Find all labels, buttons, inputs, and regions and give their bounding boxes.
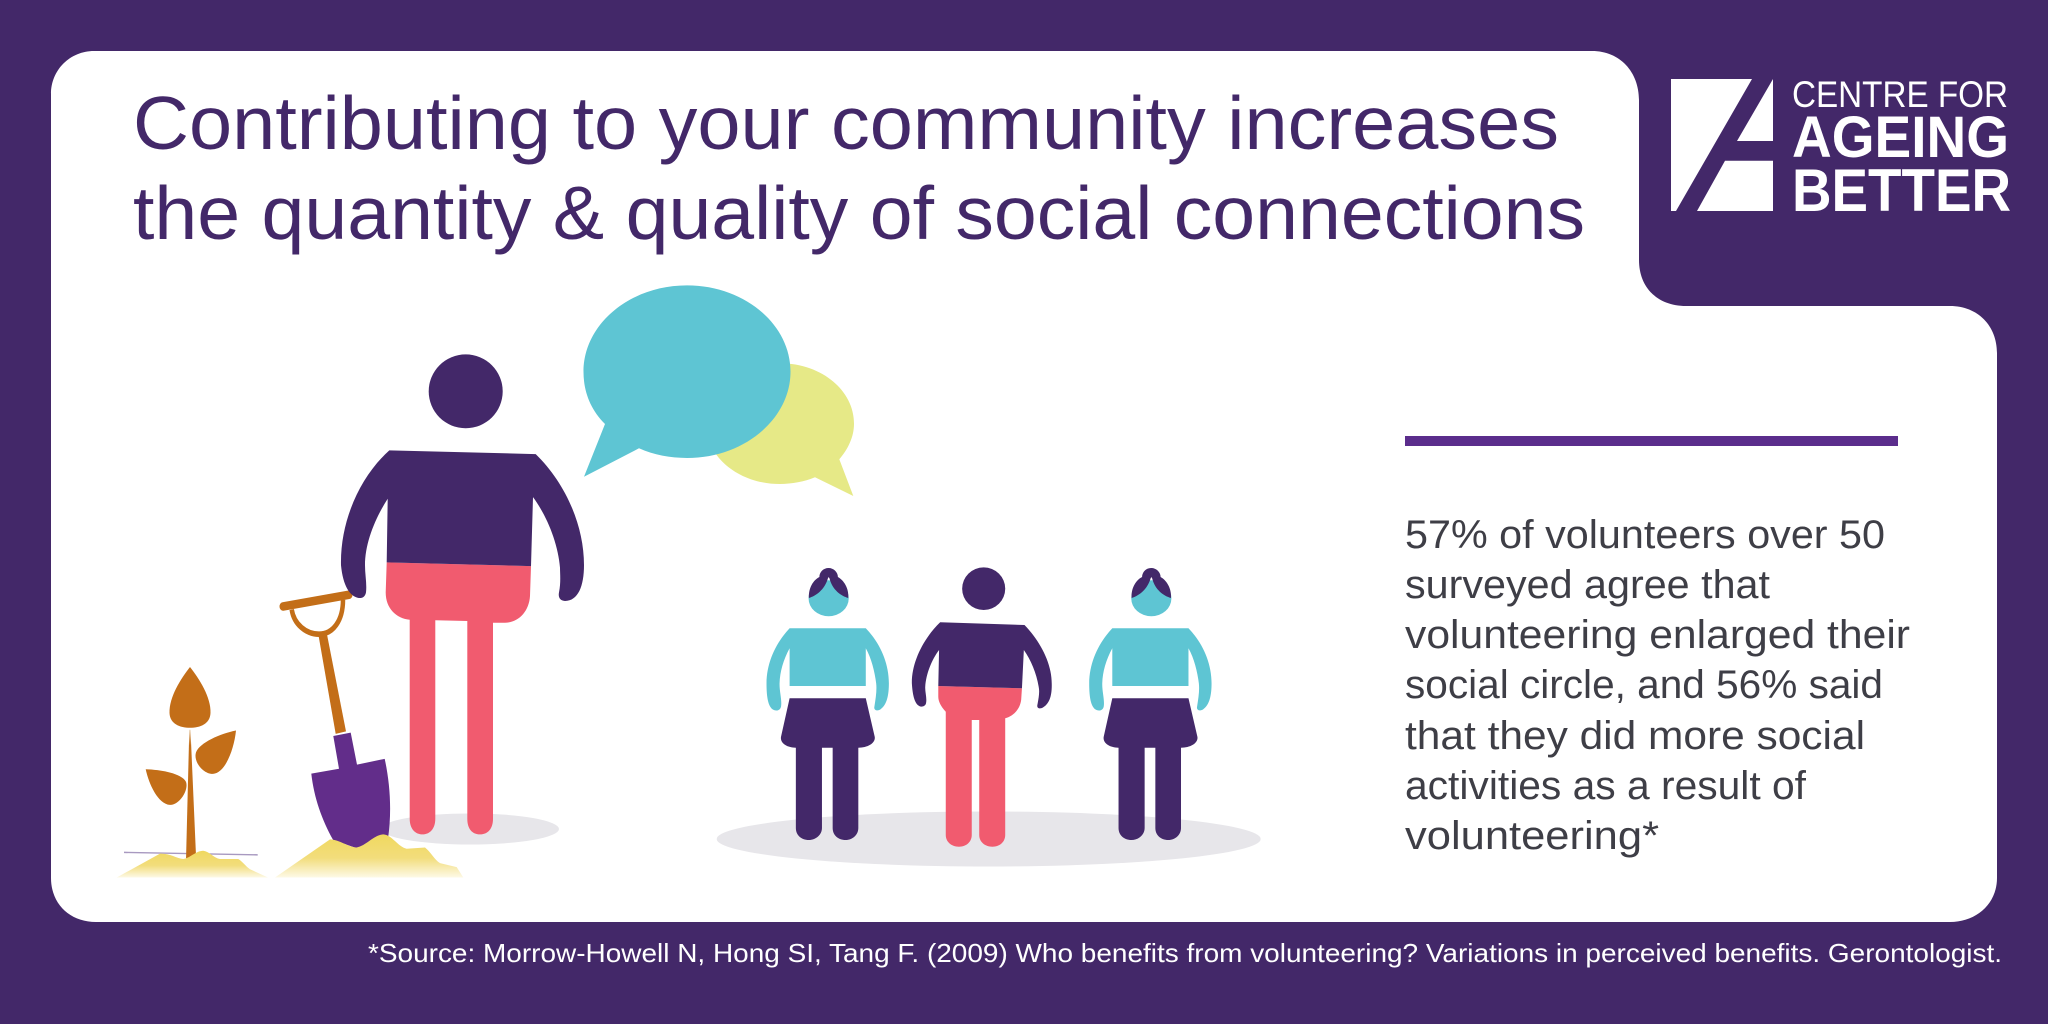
logo wordmark: CENTRE FOR [1792, 74, 2008, 115]
illustration: plant in soil [117, 667, 268, 878]
man legs and shorts [938, 686, 1022, 847]
man figure centre [912, 567, 1052, 847]
illustration: group of three figures [767, 567, 1212, 847]
horizon line [124, 852, 258, 855]
spade shaft [318, 633, 346, 734]
plant left leaf [146, 769, 187, 805]
man head [962, 567, 1005, 610]
logo: Centre for Ageing Better [1671, 74, 2011, 224]
statistic text block: activities as a result of [1405, 764, 1807, 808]
plant right leaf [195, 731, 236, 774]
woman top [767, 628, 889, 711]
illustration: speech bubbles [584, 285, 854, 496]
woman figure left [767, 568, 889, 840]
statistic text block [1405, 513, 1910, 858]
title: the quantity & quality of social connections [133, 171, 1585, 255]
logo wordmark [1792, 74, 2011, 224]
title: Contributing to your community increases [133, 81, 1559, 165]
woman face [809, 580, 849, 616]
woman skirt and legs [781, 698, 875, 840]
statistic text block: 57% of volunteers over 50 [1405, 513, 1885, 557]
ground shadow under group [717, 812, 1261, 866]
woman face [1131, 580, 1171, 616]
large figure head [429, 354, 503, 428]
soil mound left [117, 851, 268, 878]
statistic text block: volunteering* [1405, 814, 1659, 858]
spade blade [311, 733, 390, 848]
soil mound right [275, 834, 463, 878]
accent rule above statistic [1405, 436, 1898, 446]
woman hair and bun [1132, 568, 1171, 598]
statistic text block: volunteering enlarged their [1405, 613, 1910, 657]
large figure legs and shorts [386, 562, 531, 834]
illustration: large figure with spade [341, 354, 584, 834]
woman figure right [1089, 568, 1212, 840]
illustration: spade [275, 595, 463, 878]
woman skirt and legs [1104, 698, 1198, 840]
woman top [1089, 628, 1212, 711]
spade D grip [292, 600, 343, 634]
statistic text block: social circle, and 56% said [1405, 663, 1883, 707]
plant top leaf [169, 667, 211, 728]
statistic text block: surveyed agree that [1405, 563, 1770, 607]
ground shadow under large figure [381, 814, 559, 844]
spade handle bar [283, 595, 349, 606]
statistic text block: that they did more social [1405, 714, 1865, 758]
teal speech bubble [584, 285, 790, 477]
plant stem [186, 730, 196, 861]
logo mark [1671, 79, 1773, 211]
source footnote: *Source: Morrow-Howell N, Hong SI, Tang F. (2009) Who benefits from volunteering? Variations in perceived benefits. Gerontologist. [368, 938, 2002, 968]
title [133, 81, 1585, 255]
large figure torso and arms [341, 450, 584, 601]
logo wordmark: AGEING [1792, 105, 2009, 170]
woman hair and bun [809, 568, 848, 598]
yellow speech bubble [706, 363, 854, 496]
man torso and arms [912, 622, 1052, 708]
logo wordmark: BETTER [1792, 157, 2011, 224]
